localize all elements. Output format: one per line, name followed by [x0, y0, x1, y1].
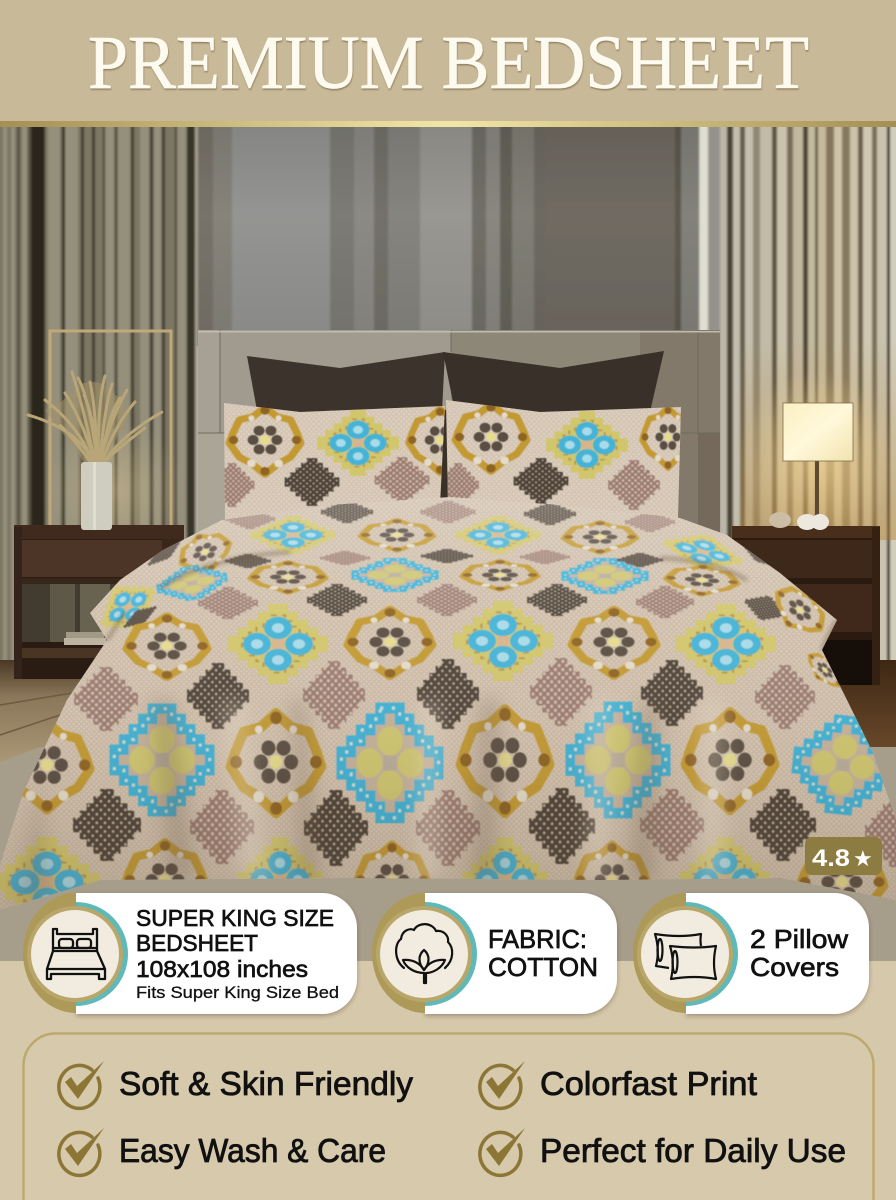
badge circle [633, 893, 738, 1013]
dark back pillows [247, 351, 664, 416]
gold divider bar [0, 121, 896, 127]
patterned duvet [0, 495, 896, 927]
table lamp [783, 403, 853, 522]
benefit: easy wash and care [59, 1128, 386, 1175]
card text: SUPER KING SIZE [136, 905, 334, 931]
patterned pillow left [224, 403, 445, 520]
fourth row motifs [74, 658, 815, 731]
feature card: fabric cotton [372, 893, 617, 1014]
feature card: pillow covers [633, 893, 869, 1014]
benefit: perfect for daily use: Perfect for Daily Use [540, 1132, 846, 1169]
card text: 2 Pillow [750, 924, 848, 954]
card text [750, 924, 848, 982]
card body [686, 893, 869, 1014]
bedroom photo scene [0, 126, 896, 961]
left curtain [0, 126, 198, 686]
icon: cotton boll [396, 924, 452, 983]
benefit: colorfast print [480, 1061, 757, 1108]
bottom row motifs [0, 836, 889, 906]
card text [488, 924, 598, 982]
benefit: easy wash and care: Easy Wash & Care [119, 1132, 386, 1169]
vase with dried plant [28, 372, 162, 530]
sixth row motifs [73, 788, 896, 867]
header band [0, 0, 896, 122]
wood floor [0, 660, 896, 780]
rating badge [805, 837, 882, 875]
left nightstand [14, 525, 184, 679]
top row motifs [147, 500, 769, 571]
benefit: soft and skin friendly [59, 1061, 414, 1108]
icon: two pillows [655, 934, 716, 979]
lower beige section [0, 961, 896, 1200]
third row motifs [126, 601, 776, 684]
books [64, 632, 106, 645]
second row motifs [89, 549, 848, 693]
rating badge: 4.8 [812, 845, 850, 872]
benefit: colorfast print: Colorfast Print [540, 1065, 757, 1102]
headboard [198, 330, 720, 535]
decorative stones [769, 512, 829, 530]
decorative gold frame [50, 331, 171, 525]
rug [0, 747, 896, 961]
card body [76, 893, 357, 1014]
wall panels [190, 126, 705, 346]
title: PREMIUM BEDSHEET [88, 21, 809, 105]
card text: 108x108 inches [136, 956, 308, 982]
benefit: perfect for daily use [480, 1128, 846, 1175]
card text: Fits Super King Size Bed [136, 983, 339, 1002]
feature card: super king size [23, 893, 357, 1014]
card text: Covers [750, 952, 839, 982]
right nightstand [732, 526, 880, 685]
card text: COTTON [488, 952, 598, 982]
card text: FABRIC: [488, 924, 587, 954]
badge circle [23, 893, 128, 1013]
card text [136, 905, 339, 1002]
badge circle [372, 893, 477, 1013]
card body [425, 893, 617, 1014]
right curtain [699, 126, 896, 726]
rating badge: ★ [853, 847, 873, 872]
icon: bed [47, 929, 105, 979]
patterned pillow right [446, 400, 681, 518]
fifth row motifs [4, 707, 893, 818]
benefit: soft and skin friendly: Soft & Skin Friendly [119, 1065, 414, 1102]
benefits panel [24, 1034, 874, 1200]
card text: BEDSHEET [136, 930, 258, 956]
